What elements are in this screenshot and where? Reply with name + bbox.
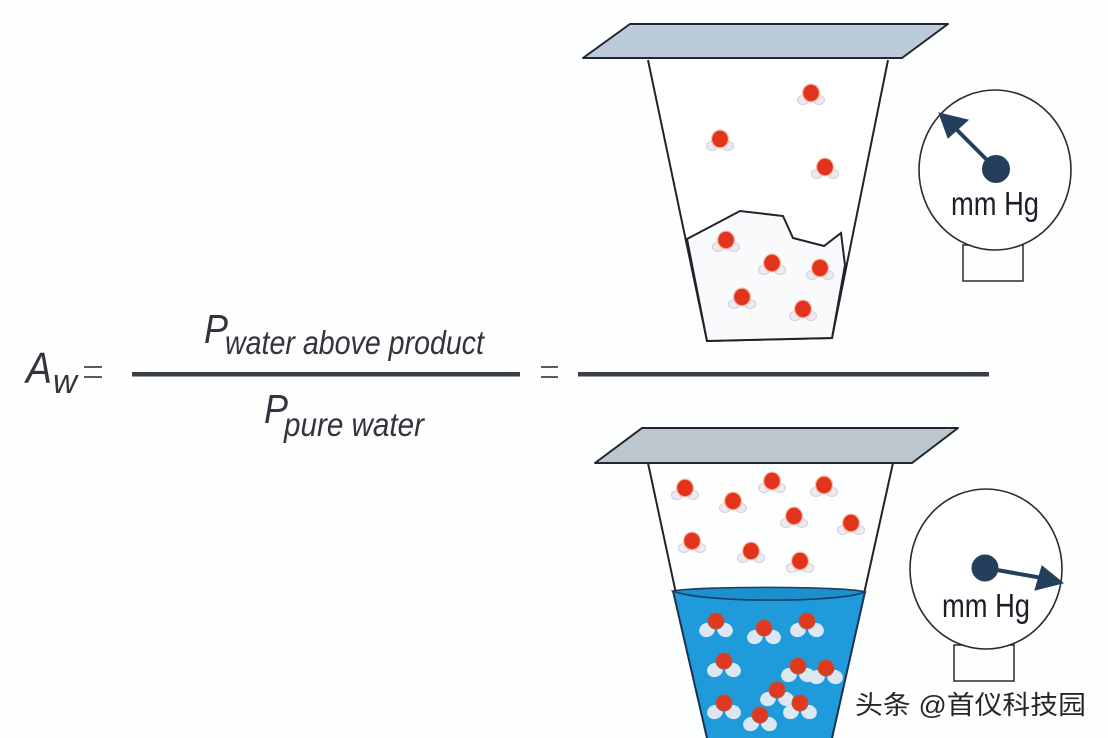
numerator <box>204 306 486 361</box>
gauge 1 <box>919 90 1071 281</box>
jar walls over water <box>673 591 865 738</box>
gauge label: mm Hg <box>942 587 1030 624</box>
watermark: 头条 @首仪科技园 <box>855 690 1086 720</box>
gauge label: mm Hg <box>951 185 1039 222</box>
jar outline <box>648 60 888 341</box>
jar 2: pure water <box>595 428 958 738</box>
equation <box>23 306 989 443</box>
lid <box>583 24 948 58</box>
gauge stand <box>954 645 1014 681</box>
gauge stand <box>963 245 1023 281</box>
denominator <box>264 386 426 443</box>
molecules in product <box>712 230 834 320</box>
water surface <box>673 587 865 600</box>
A sub w label <box>23 344 79 401</box>
jar 1: product <box>583 24 948 341</box>
gauge dial <box>919 90 1071 250</box>
gauge needle high-left <box>939 113 1010 182</box>
gauge 2 <box>910 489 1063 681</box>
denominator: pure water <box>283 406 426 443</box>
water body <box>673 587 865 738</box>
jar outline <box>648 463 893 738</box>
molecules in water <box>697 612 845 733</box>
molecules in headspace <box>672 472 864 572</box>
fraction bar 2 <box>578 372 989 376</box>
molecules in headspace <box>706 84 838 178</box>
equals sign 1 <box>84 366 102 378</box>
numerator: water above product <box>225 324 486 361</box>
lid <box>595 428 958 463</box>
A sub w label: A <box>23 344 52 393</box>
A sub w label: w <box>53 363 79 401</box>
gauge needle low-right <box>972 555 1063 590</box>
product chunk <box>687 211 845 341</box>
equals sign 2 <box>541 366 558 378</box>
numerator: P <box>204 306 229 352</box>
fraction bar 1 <box>132 372 520 376</box>
denominator: P <box>264 386 289 432</box>
gauge dial <box>910 489 1062 649</box>
